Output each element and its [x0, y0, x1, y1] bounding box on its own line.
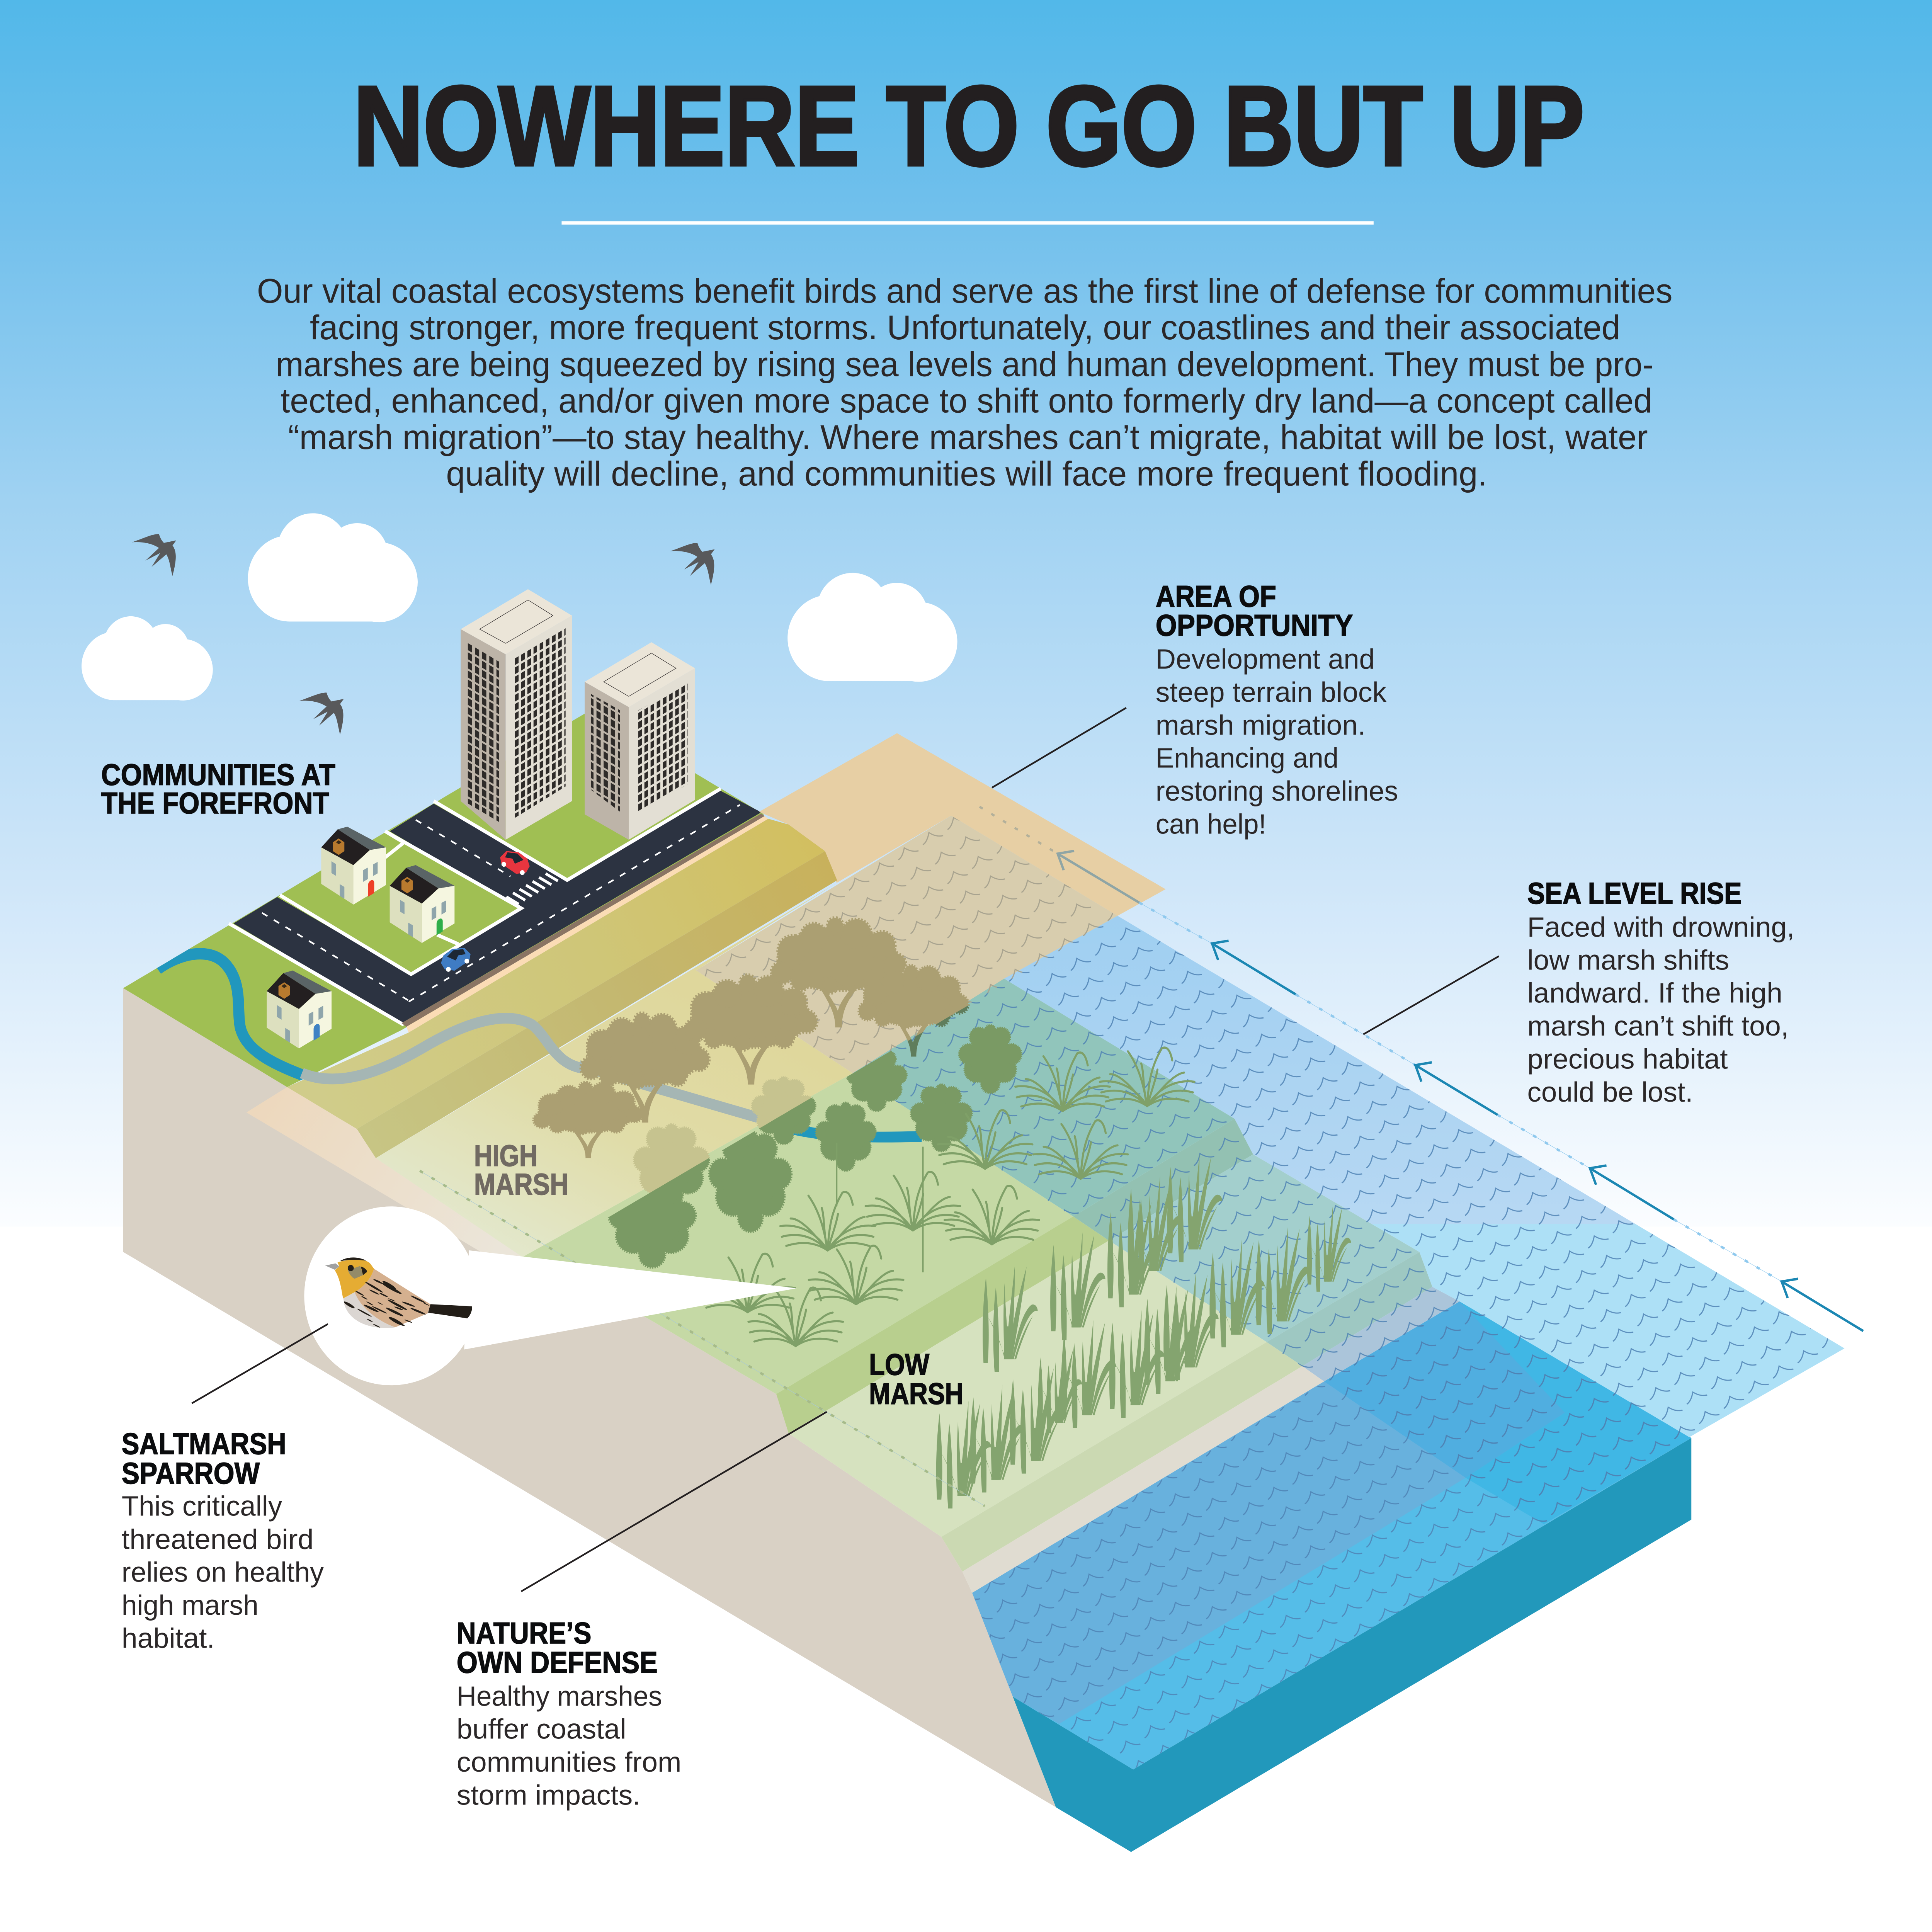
- green shrubs and tree base: [609, 965, 1022, 1267]
- low marsh lower strip: [941, 1342, 1303, 1571]
- house 1: [321, 827, 386, 905]
- area of opportunity sheet: over sky: [759, 733, 1166, 916]
- marsh grass tufts: [700, 1048, 1194, 1346]
- low marsh flat: [789, 1241, 1267, 1537]
- label: high marsh: HIGH: [474, 1139, 537, 1173]
- bird 1: [132, 534, 176, 576]
- pale shrubs above the marsh line: [634, 1077, 815, 1207]
- callout: saltmarsh sparrow: SPARROW: [122, 1457, 260, 1490]
- arrow 3: [1590, 1165, 1674, 1219]
- grey dashed section: [980, 807, 1058, 854]
- intro paragraph: facing stronger, more frequent storms. Unfortunately, our coastlines and their associated: [310, 308, 1620, 347]
- callout: sea level rise: could be lost.: [1527, 1077, 1693, 1108]
- intro paragraph: marshes are being squeezed by rising sea levels and human development. They must be pro-: [276, 345, 1653, 384]
- bird 2: [670, 543, 714, 585]
- intro paragraph: Our vital coastal ecosystems benefit birds and serve as the first line of defense for communities: [257, 272, 1672, 310]
- grey arrow: [1058, 851, 1139, 903]
- callout: area of opportunity: can help!: [1156, 809, 1266, 840]
- intro paragraph: “marsh migration”—to stay healthy. Where marshes can’t migrate, habitat will be lost, water: [288, 418, 1648, 456]
- berm flat: [287, 819, 825, 1129]
- sea level sheet: over marsh: [853, 979, 1459, 1381]
- label: low marsh: [869, 1348, 964, 1411]
- callout: area of opportunity: OPPORTUNITY: [1156, 609, 1353, 642]
- tower 1: [461, 589, 572, 840]
- stream through marsh: [302, 1018, 922, 1137]
- label: low marsh: MARSH: [869, 1377, 964, 1411]
- water block front face: [1013, 1438, 1691, 1852]
- callout: area of opportunity: Enhancing and: [1156, 743, 1338, 774]
- title divider: [561, 221, 1374, 224]
- callout: saltmarsh sparrow: threatened bird: [122, 1524, 314, 1555]
- callout: sea level rise: Faced with drowning,: [1527, 912, 1794, 943]
- callout: area of opportunity: steep terrain block: [1156, 677, 1386, 708]
- intro paragraph: tected, enhanced, and/or given more space to shift onto formerly dry land—a concept called: [281, 381, 1652, 420]
- stream through community: [158, 954, 311, 1078]
- house 3: [267, 971, 332, 1048]
- leader: area of opportunity: [992, 708, 1126, 788]
- intro paragraph: [257, 272, 1672, 493]
- sea level sheet: over sky: [1004, 916, 1845, 1437]
- label: low marsh: LOW: [869, 1348, 930, 1381]
- label: communities at the forefront: [101, 758, 335, 820]
- low marsh reeds: [936, 1154, 1351, 1509]
- callout: sea level rise: [1527, 877, 1794, 1108]
- area of opportunity sheet: over sand: [247, 1087, 522, 1272]
- callout: saltmarsh sparrow: high marsh: [122, 1590, 259, 1621]
- house 2: [390, 865, 454, 943]
- callout: saltmarsh sparrow: This critically: [122, 1491, 282, 1522]
- callout: nature's own defense: communities from: [457, 1747, 681, 1778]
- callout: area of opportunity: restoring shorelines: [1156, 776, 1398, 807]
- clouds: [82, 513, 957, 701]
- road network: [229, 789, 768, 1032]
- water surface: [972, 1301, 1691, 1769]
- callout: saltmarsh sparrow: [122, 1427, 324, 1654]
- crosswalk: [507, 874, 558, 904]
- mid marsh flat: [522, 1073, 1073, 1394]
- label: communities at the forefront: THE FOREFRONT: [101, 787, 329, 820]
- tower 2: [585, 642, 695, 840]
- berm slope: [357, 851, 837, 1158]
- callout: sea level rise: low marsh shifts: [1527, 945, 1729, 976]
- water band: current shallows: [972, 1381, 1466, 1724]
- callout: area of opportunity: AREA OF: [1156, 580, 1276, 613]
- community ground: [123, 710, 764, 1087]
- flying birds: [132, 534, 714, 735]
- cloud: far left: [82, 616, 213, 701]
- callout spotlight: [304, 1206, 797, 1385]
- callout: nature's own defense: OWN DEFENSE: [457, 1646, 658, 1679]
- front dashed migration line: [420, 1171, 985, 1506]
- callout: nature's own defense: Healthy marshes: [457, 1681, 662, 1712]
- callout: saltmarsh sparrow: relies on healthy: [122, 1557, 324, 1588]
- callout: nature's own defense: storm impacts.: [457, 1780, 641, 1811]
- leader lines: [192, 708, 1499, 1592]
- callout: saltmarsh sparrow: habitat.: [122, 1623, 215, 1654]
- callout: area of opportunity: [1156, 580, 1398, 840]
- road edge strips: [401, 813, 765, 1027]
- leader: nature's own defense: [521, 1412, 827, 1592]
- callout: sea level rise: SEA LEVEL RISE: [1527, 877, 1742, 910]
- high marsh under sea-level sheet: [696, 816, 1117, 1073]
- sea level arrows and dashed line: [980, 807, 1863, 1331]
- label: high marsh: MARSH: [474, 1168, 568, 1201]
- callout: saltmarsh sparrow: SALTMARSH: [122, 1427, 286, 1461]
- arrow 1: [1212, 941, 1296, 994]
- label: communities at the forefront: COMMUNITIES AT: [101, 758, 335, 792]
- cross-section block: sand face: [123, 988, 1056, 1807]
- callout: sea level rise: marsh can’t shift too,: [1527, 1011, 1789, 1042]
- high marsh trees and shrubs seen through the sheet: [534, 918, 968, 1158]
- callout: nature's own defense: buffer coastal: [457, 1714, 626, 1745]
- leader: sea level rise: [1363, 956, 1499, 1034]
- arrow 4: [1782, 1279, 1863, 1331]
- saltmarsh sparrow: [325, 1257, 472, 1328]
- callout: area of opportunity: marsh migration.: [1156, 710, 1366, 741]
- dashes: [1139, 903, 1782, 1282]
- callout: sea level rise: precious habitat: [1527, 1044, 1728, 1075]
- cloud: centre: [787, 573, 957, 682]
- callout: area of opportunity: Development and: [1156, 644, 1375, 675]
- water band: sea level overlap: [1324, 1301, 1565, 1478]
- water band: deep: [1459, 1301, 1691, 1524]
- arrow 2: [1415, 1062, 1498, 1115]
- intro paragraph: quality will decline, and communities will face more frequent flooding.: [446, 455, 1487, 493]
- marsh slope: [776, 1216, 1109, 1434]
- high marsh zone: [376, 883, 853, 1257]
- label: high marsh: [474, 1139, 568, 1201]
- callout: nature's own defense: NATURE’S: [457, 1617, 592, 1650]
- callout: nature's own defense: [457, 1617, 681, 1811]
- beach strip: [962, 1366, 1324, 1593]
- bird 3: [299, 692, 344, 735]
- title: NOWHERE TO GO BUT UP: [354, 63, 1584, 189]
- callout: sea level rise: landward. If the high: [1527, 978, 1782, 1009]
- wave pattern: [696, 816, 1845, 1769]
- red car: [500, 851, 530, 875]
- leader: saltmarsh sparrow: [192, 1324, 328, 1403]
- blue car: [441, 948, 471, 972]
- cloud: upper left: [248, 513, 418, 622]
- dashed guide: [1139, 903, 1782, 1282]
